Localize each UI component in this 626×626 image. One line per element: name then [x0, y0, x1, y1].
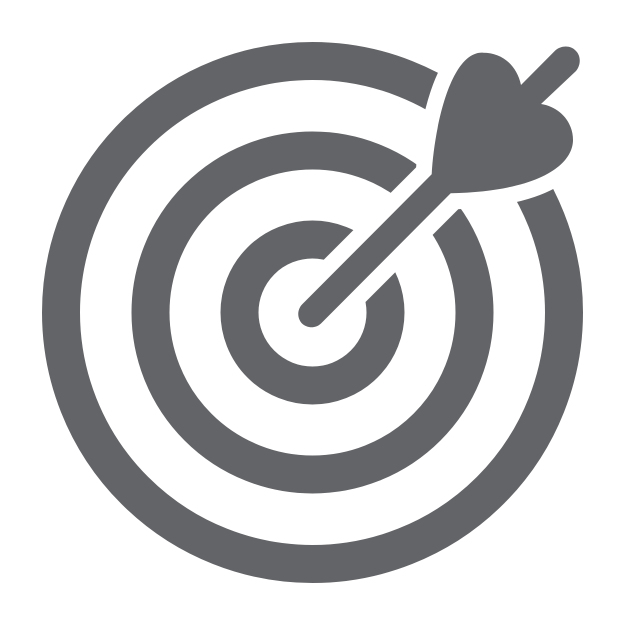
white gap around arrow [312, 53, 573, 314]
arrow [298, 46, 580, 327]
target rings [61, 61, 564, 564]
